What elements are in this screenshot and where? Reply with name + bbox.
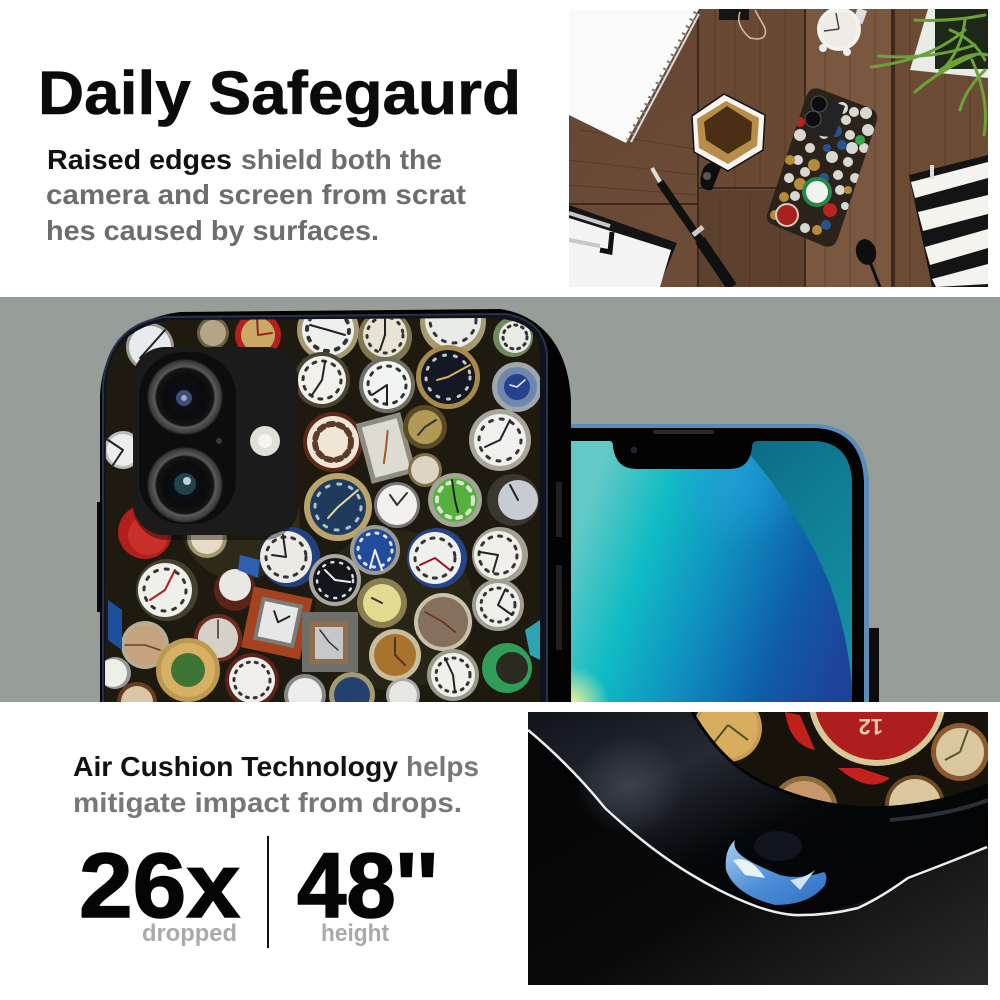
- plant in white pot: [871, 9, 988, 135]
- clock pattern: [105, 318, 540, 702]
- flash: [250, 426, 280, 456]
- photo: air cushion corner close-up: [528, 712, 988, 985]
- text block: raised edges description: [46, 144, 466, 246]
- clocks: [105, 318, 540, 702]
- text block: raised edges description: camera and screen from scrat: [46, 179, 466, 210]
- stat divider: [267, 836, 269, 948]
- binder clip: [719, 9, 765, 39]
- grey band panel: [0, 289, 1000, 722]
- pen: [652, 168, 732, 287]
- white edge highlight: [528, 730, 987, 915]
- stat: 48 inches height: height: [321, 920, 389, 947]
- air cushion droplet: [726, 831, 826, 905]
- stat: 26x dropped: 26x: [79, 835, 240, 937]
- text block: air cushion description: Air Cushion Technology: [73, 751, 398, 782]
- upper lens: [147, 359, 223, 435]
- striped notebook: [909, 155, 988, 287]
- text block: air cushion description: [73, 751, 479, 818]
- case edge: [528, 712, 988, 913]
- notebook: [569, 9, 699, 143]
- coffee mug: [692, 94, 765, 190]
- small white clock: [817, 7, 867, 56]
- phone back: case with clock pattern: [97, 289, 571, 722]
- camera module: [133, 347, 298, 540]
- spoon: [853, 237, 880, 287]
- phone front: blue iPhone with gradient wallpaper: [560, 424, 879, 702]
- stat: 26x dropped: dropped: [142, 920, 237, 947]
- text block: raised edges description: Raised edges: [47, 144, 232, 175]
- clipboard: [569, 205, 677, 287]
- photo: phone case on wooden desk: [569, 7, 988, 287]
- title: Daily Safegaurd: [38, 59, 521, 127]
- clock window: [694, 712, 988, 806]
- clock window: 12: [859, 714, 883, 739]
- text block: air cushion description: helps: [406, 751, 479, 782]
- mini phone with clock pattern: [766, 88, 878, 247]
- text block: raised edges description: shield both the: [241, 144, 442, 175]
- text block: air cushion description: mitigate impact from drops.: [73, 787, 462, 818]
- text block: raised edges description: hes caused by surfaces.: [46, 215, 379, 246]
- stat: 48 inches height: 48'': [297, 835, 438, 937]
- lower lens: [147, 447, 223, 523]
